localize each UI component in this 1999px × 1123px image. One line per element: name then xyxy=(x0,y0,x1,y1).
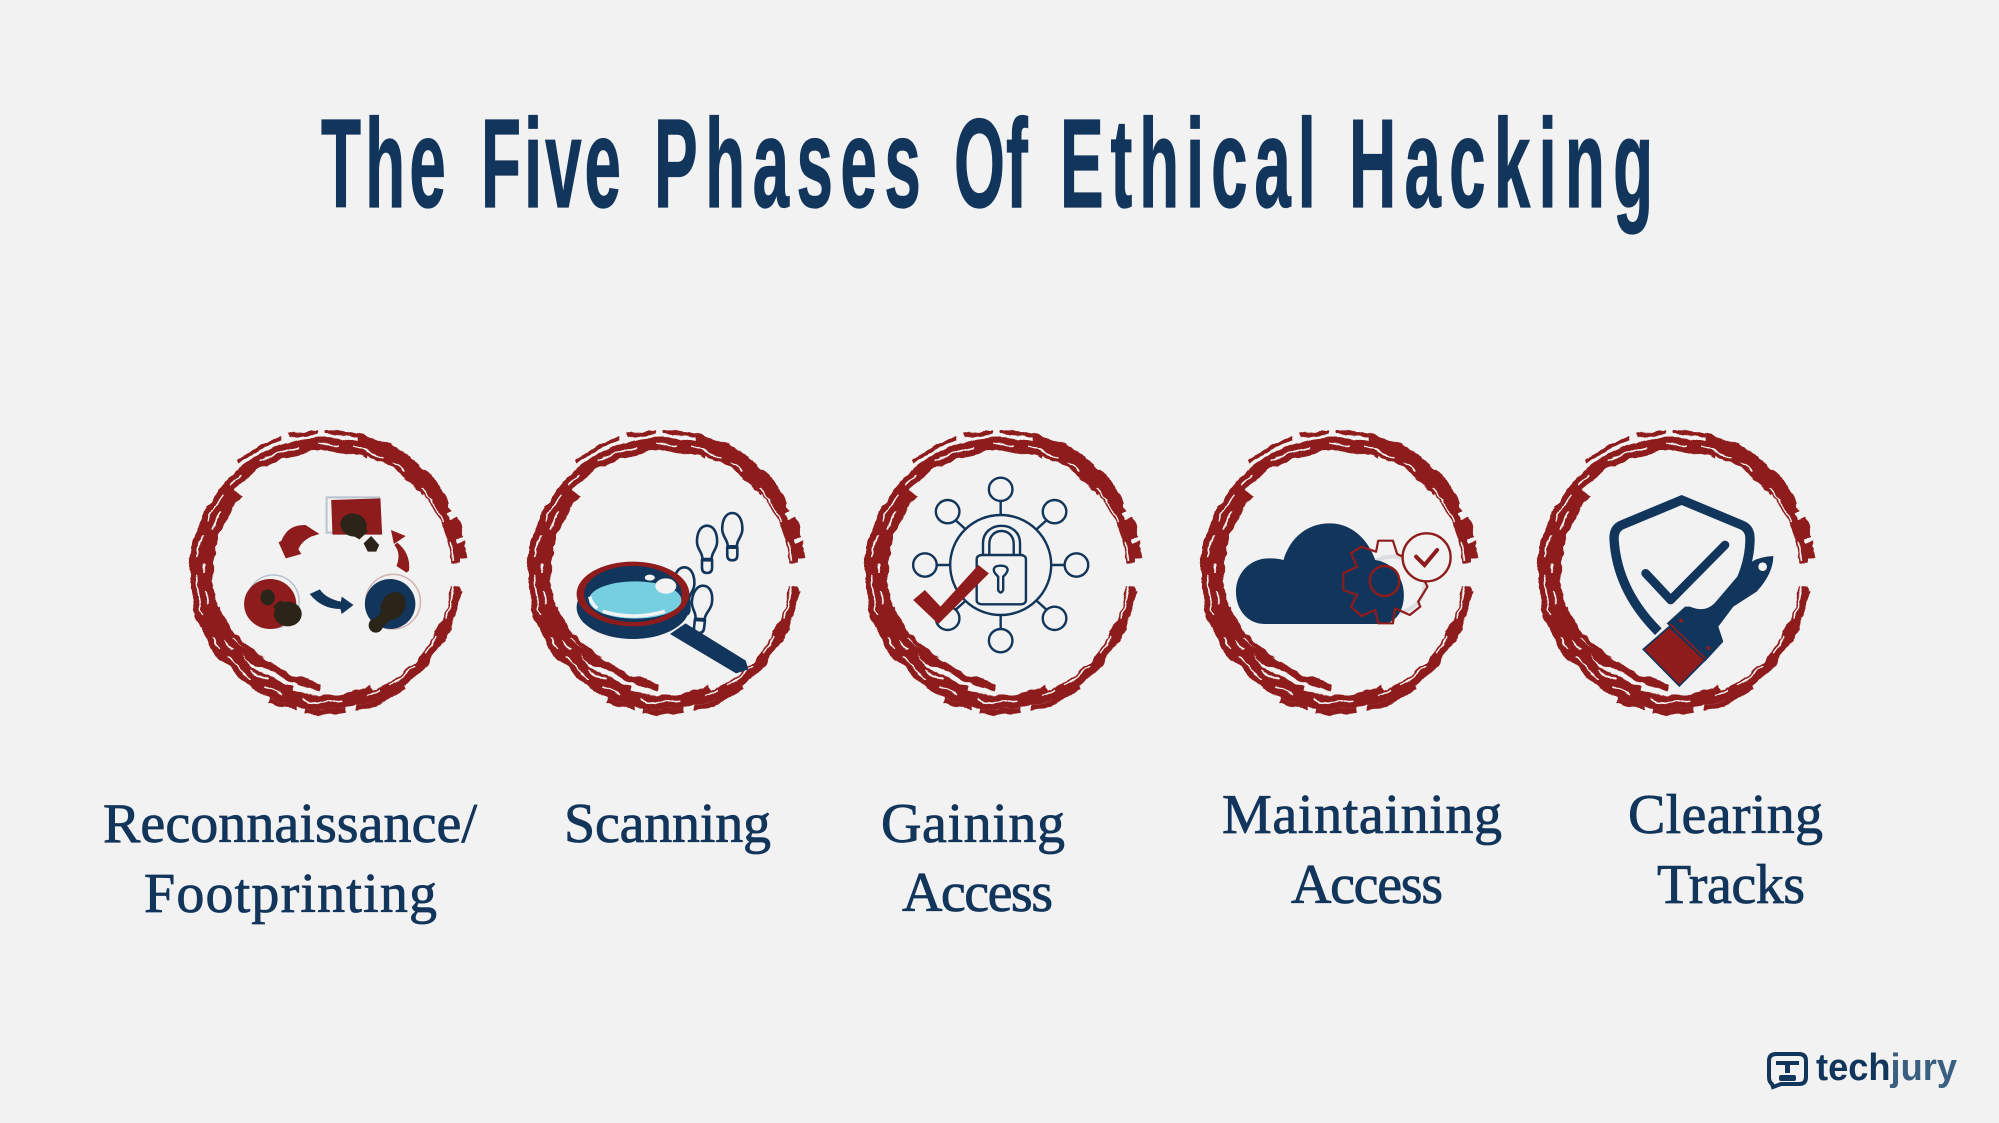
title xyxy=(321,94,1653,235)
label: Clearing Tracks xyxy=(1628,784,1823,916)
ring: brush circle 1 xyxy=(184,432,466,714)
icon: shield with check and paint brush xyxy=(1614,500,1773,686)
icon: footprints cycle xyxy=(244,497,420,633)
title: Five xyxy=(481,94,621,235)
panel: reconnaissance xyxy=(103,432,477,925)
label: Reconnaissance/ Footprinting: Footprinting xyxy=(144,863,437,925)
panel: gaining access xyxy=(859,432,1141,924)
label: Scanning: Scanning xyxy=(564,793,771,855)
ring: brush circle 4 xyxy=(1195,432,1477,714)
label: Reconnaissance/ Footprinting: Reconnaissance/ xyxy=(103,793,477,855)
panel: clearing tracks xyxy=(1532,432,1823,916)
ring: brush circle 3 xyxy=(859,432,1141,714)
title: Hacking xyxy=(1349,94,1653,235)
icon: magnifying glass and footprints xyxy=(577,513,748,673)
label: Gaining Access: Access xyxy=(902,862,1053,924)
title: The xyxy=(321,94,446,235)
ring: brush circle 5 xyxy=(1532,432,1814,714)
label: Clearing Tracks: Clearing xyxy=(1628,784,1823,846)
icon: network lock with check xyxy=(913,478,1088,652)
label: Maintaining Access: Maintaining xyxy=(1222,784,1502,846)
title: Phases xyxy=(654,94,921,235)
logo: techjury xyxy=(1769,1047,1957,1089)
title: Ethical xyxy=(1060,94,1316,235)
title: Of xyxy=(954,94,1028,235)
label: Reconnaissance/ Footprinting xyxy=(103,793,477,925)
ring: brush circle 2 xyxy=(522,432,804,714)
label: Gaining Access xyxy=(881,793,1065,924)
wordmark: techjury xyxy=(1816,1047,1957,1089)
icon: cloud gear and check xyxy=(1236,523,1451,624)
icon: chat robot xyxy=(1769,1054,1806,1087)
panel: scanning xyxy=(522,432,804,855)
label: Maintaining Access xyxy=(1222,784,1502,916)
label: Clearing Tracks: Tracks xyxy=(1657,854,1805,916)
label: Gaining Access: Gaining xyxy=(881,793,1065,855)
panel: maintaining access xyxy=(1195,432,1502,916)
label: Maintaining Access: Access xyxy=(1291,854,1443,916)
